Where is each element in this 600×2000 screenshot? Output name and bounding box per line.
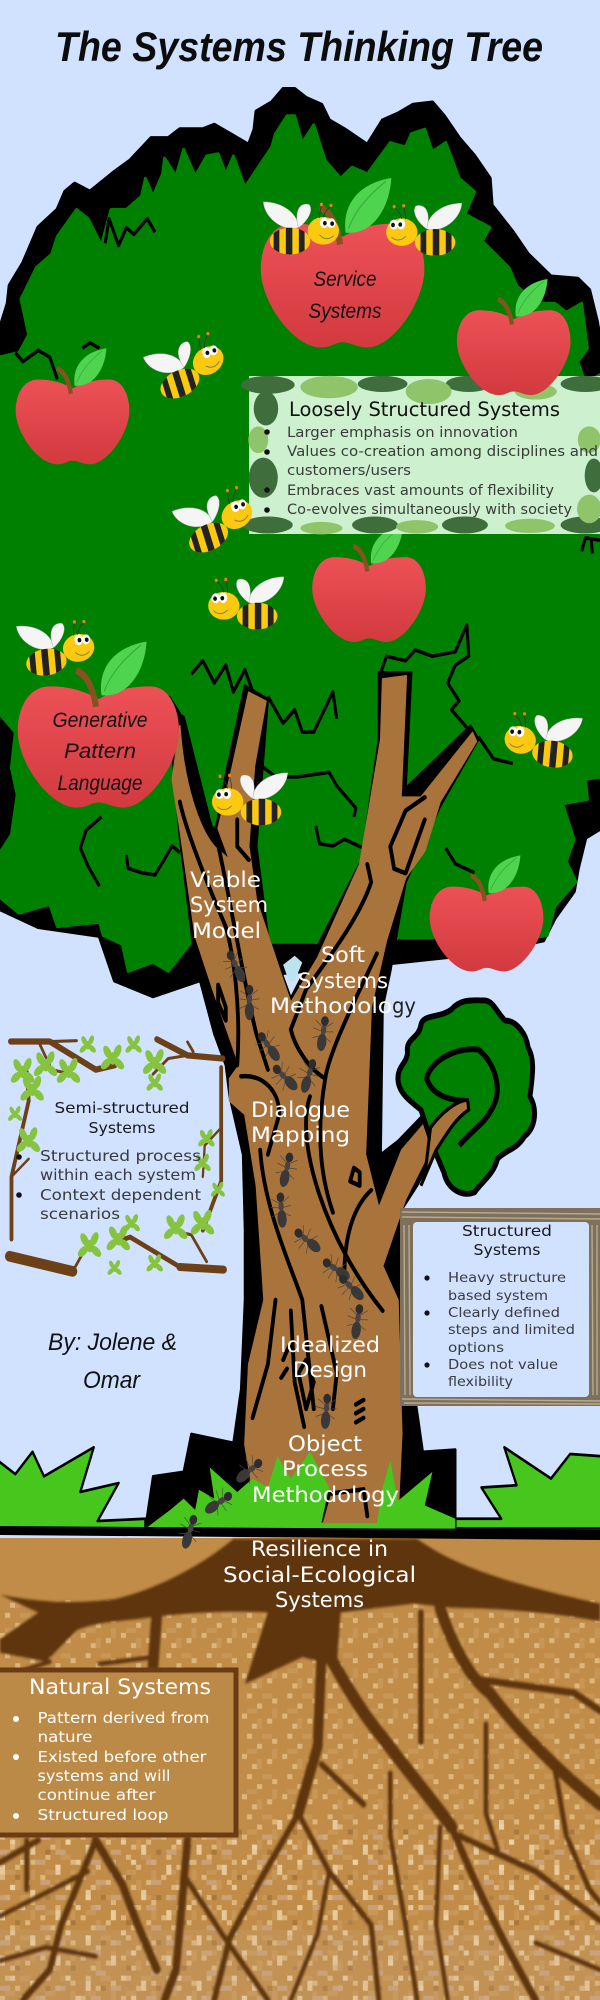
apple: service systems xyxy=(261,178,424,347)
label: resilience in social-ecological systems: Resilience in xyxy=(251,1537,388,1561)
label: viable system model: System xyxy=(190,893,268,917)
panel list: systems and will xyxy=(38,1767,170,1785)
panel list: options xyxy=(448,1340,504,1356)
apple: upper right xyxy=(457,279,571,395)
panel: semi-structured systems xyxy=(7,1034,226,1276)
panel heading: Structured xyxy=(462,1222,552,1240)
panel list: steps and limited xyxy=(448,1322,575,1338)
roots xyxy=(0,1539,600,2000)
label: soft systems methodology: Methodolo xyxy=(270,994,392,1018)
label: object process methodology: Process xyxy=(282,1457,368,1481)
panel list xyxy=(16,1147,201,1223)
apple: service systems: Service xyxy=(314,268,376,291)
ground grass left xyxy=(0,1447,145,1529)
ground grass right xyxy=(455,1447,600,1529)
label: soft systems methodology: gy xyxy=(392,994,416,1018)
label: viable system model: Model xyxy=(192,919,261,943)
label: object process methodology: Methodology xyxy=(252,1483,399,1507)
apple: left xyxy=(16,348,129,464)
apple: service systems: Systems xyxy=(308,300,382,323)
panel heading: Systems xyxy=(88,1119,156,1137)
panel list: Does not value xyxy=(448,1357,558,1373)
label: dialogue mapping: Dialogue xyxy=(251,1098,350,1122)
panel: structured systems xyxy=(400,1208,600,1406)
panel list: Co-evolves simultaneously with society xyxy=(287,502,572,518)
panel list: Structured process xyxy=(40,1147,201,1165)
panel list: Clearly defined xyxy=(448,1305,560,1321)
label: object process methodology: Object xyxy=(288,1432,362,1456)
apple: lower right xyxy=(430,855,543,971)
apple: generative pattern language: Pattern xyxy=(64,740,136,763)
apple: generative pattern language: Language xyxy=(58,772,142,795)
bees xyxy=(16,202,583,825)
panel: natural systems xyxy=(0,1670,236,1835)
soil xyxy=(0,1538,600,2000)
panel heading: Loosely Structured Systems xyxy=(289,398,560,421)
apple: generative pattern language xyxy=(18,642,179,808)
title: The Systems Thinking Tree xyxy=(55,23,543,70)
ground grass centre xyxy=(145,1452,455,1529)
label: soft systems methodology: Soft xyxy=(321,943,365,967)
panel heading: Semi-structured xyxy=(54,1099,190,1117)
label: soft systems methodology: Systems xyxy=(298,969,388,993)
panel heading: Natural Systems xyxy=(29,1675,211,1699)
panel list xyxy=(424,1270,575,1390)
authors credit: By: Jolene & xyxy=(48,1329,177,1356)
panel list: within each system xyxy=(40,1166,196,1184)
panel list: Embraces vast amounts of flexibility xyxy=(287,483,554,499)
panel list: customers/users xyxy=(287,463,411,479)
label: dialogue mapping: Mapping xyxy=(251,1123,350,1147)
label: resilience in social-ecological systems: Social-Ecological xyxy=(223,1563,416,1587)
small side bush xyxy=(398,1000,535,1194)
label: viable system model: Viable xyxy=(190,868,261,892)
panel list: scenarios xyxy=(40,1205,120,1223)
authors credit: Omar xyxy=(83,1367,141,1394)
panel list: Structured loop xyxy=(38,1806,168,1824)
panel: loosely structured systems xyxy=(241,376,600,534)
panel list: continue after xyxy=(38,1786,156,1804)
label: idealized design: Idealized xyxy=(280,1333,380,1357)
panel list: Larger emphasis on innovation xyxy=(287,425,518,441)
apple: generative pattern language: Generative xyxy=(52,709,148,732)
panel list: nature xyxy=(38,1728,92,1746)
label: resilience in social-ecological systems: Systems xyxy=(275,1588,364,1612)
panel list: Pattern derived from xyxy=(38,1709,209,1727)
panel list: Heavy structure xyxy=(448,1270,566,1286)
panel list: Values co-creation among disciplines and xyxy=(287,444,598,460)
tree trunk and branches xyxy=(145,672,478,1528)
panel list xyxy=(13,1709,209,1824)
apple: middle, partly behind panel xyxy=(312,526,426,642)
ground line xyxy=(0,1526,600,1540)
panel list: Context dependent xyxy=(40,1186,201,1204)
panel list: Existed before other xyxy=(38,1748,207,1766)
ant trail xyxy=(174,945,370,1552)
tree canopy xyxy=(0,89,600,996)
panel list: flexibility xyxy=(448,1374,513,1390)
label: idealized design: Design xyxy=(293,1358,367,1382)
panel heading: Systems xyxy=(474,1241,541,1259)
panel list xyxy=(264,425,598,518)
panel list: based system xyxy=(448,1288,548,1304)
